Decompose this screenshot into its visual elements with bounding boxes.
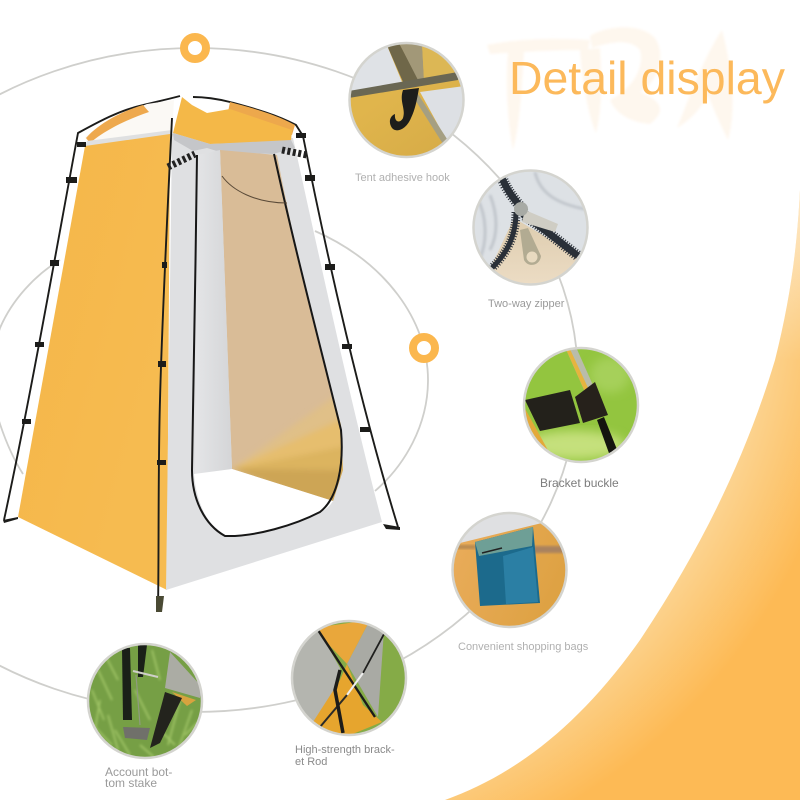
caption: account bottom stake: Account bot- [105,765,172,779]
door interior back wall [220,150,343,501]
striped tie right [282,150,307,155]
caption: high-strength bracket rod: High-strength brack- [295,744,395,756]
detail: tent adhesive hook [349,43,464,158]
left roof white and strip [85,100,174,147]
title: Detail display [509,52,786,104]
front silver panel [166,134,382,590]
caption: convenient shopping bags: Convenient shopping bags [458,641,589,653]
side orange panel [18,134,170,590]
detail: account bottom stake [87,643,203,759]
brush watermark behind title [487,27,733,150]
central pole [158,118,172,610]
door zipper outline [192,154,342,536]
orange ring marker right [413,337,435,359]
orange ring marker top [184,37,206,59]
inner ring right arc [315,231,428,491]
detail: bracket buckle [523,347,639,465]
caption: bracket buckle: Bracket buckle [540,476,619,490]
caption: account bottom stake [105,765,172,790]
caption: high-strength bracket rod [295,744,395,768]
orange corner background [445,190,800,800]
sunlit floor folds on back wall [232,398,343,501]
caption: high-strength bracket rod: et Rod [295,756,327,768]
door floor opening [194,469,333,536]
detail: convenient shopping bags [452,513,568,629]
detail: two-way zipper [473,170,590,290]
connecting outer ring [0,48,578,712]
front roof orange [173,97,292,144]
window flap seam [222,176,287,203]
caption: tent adhesive hook: Tent adhesive hook [355,172,450,184]
caption: two-way zipper: Two-way zipper [488,298,565,310]
striped tie left [168,154,195,167]
caption: account bottom stake: tom stake [105,776,157,790]
poles and roof frame [4,96,398,527]
inner ring left arc [0,260,60,474]
detail: high-strength bracket rod [291,620,407,738]
tent illustration [3,96,400,612]
door interior left wall [195,150,232,475]
right roof strip [228,102,295,135]
silver valance [173,133,295,154]
pole straps [3,133,400,612]
